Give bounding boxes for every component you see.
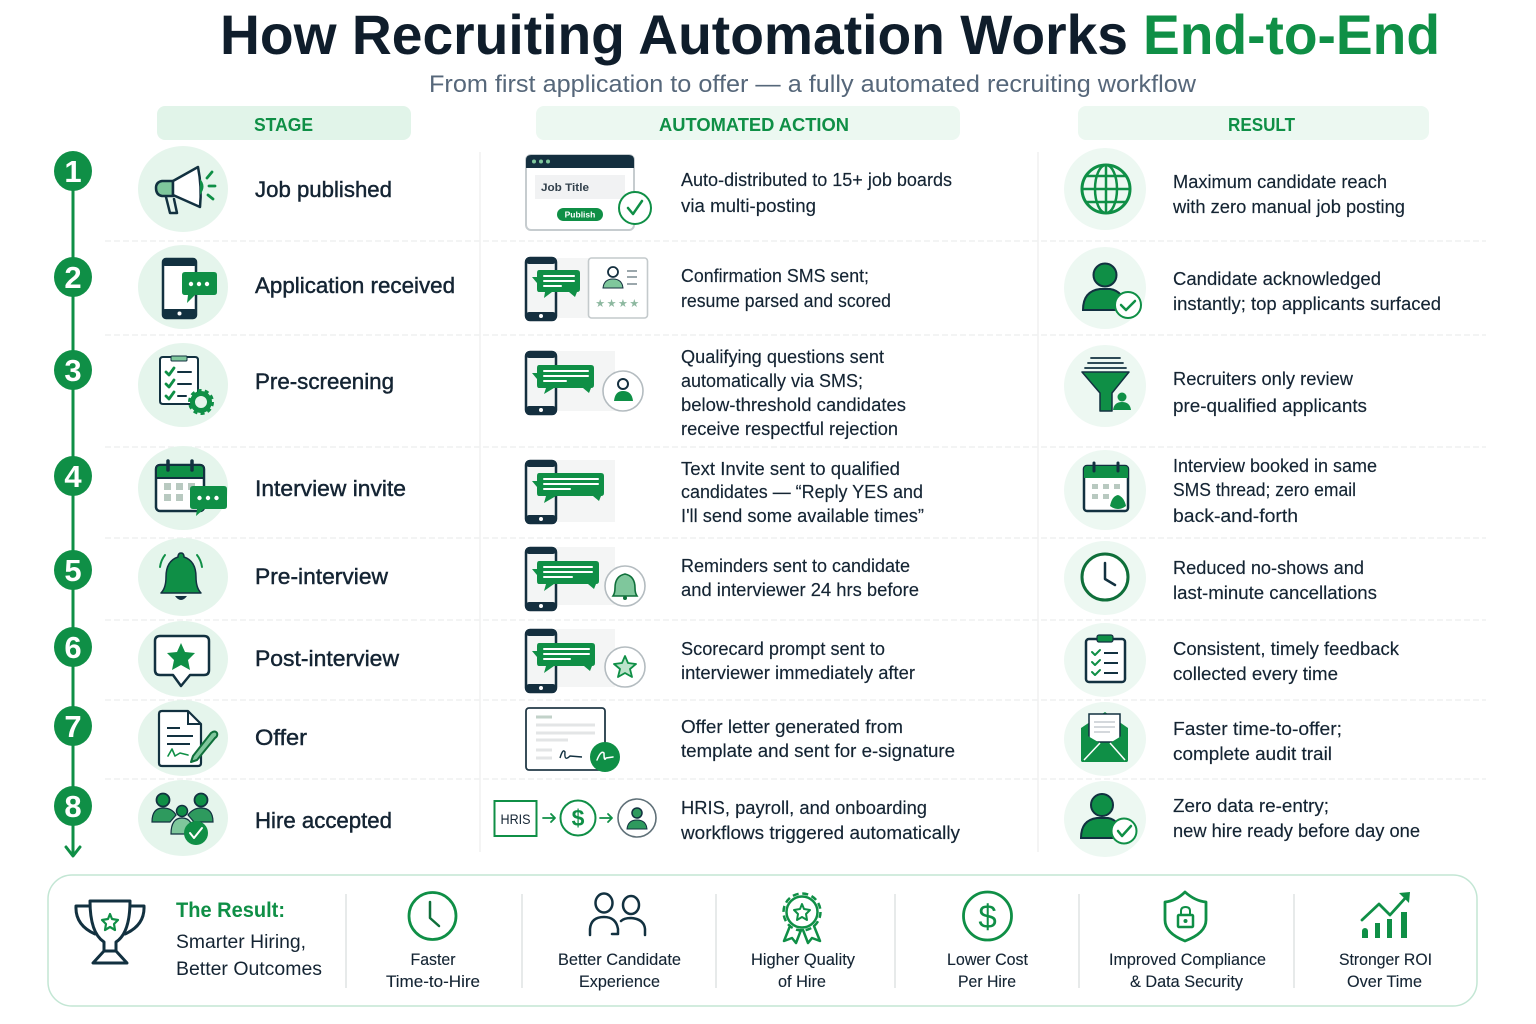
result text: Candidate acknowledged	[1173, 269, 1381, 289]
benefit: improved compliance and data security: & Data Security	[1130, 973, 1244, 991]
benefit: better candidate experience	[558, 894, 681, 991]
action icon: SMS and resume card	[526, 258, 648, 321]
result text: instantly; top applicants surfaced	[1173, 294, 1441, 314]
result text: Reduced no-shows and	[1173, 558, 1364, 578]
benefit: better candidate experience: Experience	[579, 973, 660, 991]
action text: automatically via SMS;	[681, 371, 863, 391]
result icon: new hire ready	[1064, 781, 1146, 857]
action icon: publish window: Job Title	[541, 182, 589, 194]
result icon: envelope	[1064, 702, 1146, 776]
step badge 3	[54, 350, 92, 390]
action text: candidates — “Reply YES and	[681, 482, 923, 502]
action icon: offer letter	[526, 708, 620, 772]
result text: Recruiters only review	[1173, 369, 1354, 389]
row 2: Application received	[54, 245, 1441, 329]
benefit: faster time-to-hire	[386, 892, 480, 991]
result text: back-and-forth	[1173, 506, 1298, 526]
result icon: clock	[1064, 541, 1146, 615]
action text: Text Invite sent to qualified	[681, 459, 900, 479]
benefit: improved compliance and data security	[1109, 892, 1266, 991]
stage label: Job published	[255, 177, 392, 202]
action icon: SMS invite	[526, 460, 615, 524]
icon: phone with chat bubble	[138, 245, 228, 329]
row 4: Interview invite	[54, 446, 1377, 530]
result text: SMS thread; zero email	[1173, 480, 1356, 500]
benefit: lower cost per hire: Lower Cost	[947, 951, 1028, 969]
benefit: improved compliance and data security: Improved Compliance	[1109, 951, 1266, 969]
action text	[681, 556, 919, 600]
action text: and interviewer 24 hrs before	[681, 580, 919, 600]
icon: calendar with chat	[138, 446, 228, 530]
step badge 5: 5	[64, 553, 82, 588]
stage label: Pre-screening	[255, 369, 394, 394]
row 8: Hire accepted	[54, 780, 1420, 857]
action text: receive respectful rejection	[681, 419, 898, 439]
icon: star speech bubble	[138, 621, 228, 697]
result text	[1173, 639, 1400, 684]
action icon: SMS to candidate	[526, 351, 643, 415]
icon: megaphone	[138, 146, 228, 232]
action text: I'll send some available times”	[681, 506, 924, 526]
benefit: higher quality of hire: of Hire	[778, 973, 826, 991]
result text: Zero data re-entry;	[1173, 796, 1329, 816]
benefit: stronger ROI over time: Over Time	[1347, 973, 1422, 991]
step badge 8: 8	[64, 789, 82, 824]
step badge 6	[54, 627, 92, 667]
result icon: acknowledged person	[1064, 247, 1146, 329]
result text	[1172, 172, 1405, 217]
step badge 7	[54, 706, 92, 746]
result text: complete audit trail	[1173, 744, 1332, 764]
action icon: HRIS, payroll, profile flow: HRIS	[500, 811, 530, 827]
benefit: higher quality of hire: Higher Quality	[751, 951, 856, 969]
benefit: lower cost per hire	[947, 892, 1028, 991]
result text	[1173, 719, 1342, 764]
column headers	[157, 106, 1429, 140]
stage label: Offer	[255, 725, 308, 750]
action text	[680, 798, 960, 843]
stage label: Pre-interview	[255, 564, 389, 589]
action icon: SMS reminder	[526, 547, 645, 611]
step badge 6: 6	[64, 630, 82, 665]
benefit: stronger ROI over time: Stronger ROI	[1339, 951, 1432, 969]
result text: collected every time	[1173, 664, 1338, 684]
result icon: globe	[1064, 148, 1146, 230]
action icon: SMS and resume card: ★★★★	[595, 298, 641, 310]
result heading: The Result:	[176, 899, 285, 922]
step badge 1	[54, 151, 92, 191]
result text	[1173, 269, 1441, 314]
step badge 7: 7	[64, 709, 82, 744]
result icon: clipboard	[1064, 623, 1146, 697]
icon: document and pen	[138, 700, 228, 776]
icon: checklist and gear	[138, 343, 228, 427]
benefit: better candidate experience: Better Candidate	[558, 951, 681, 969]
action text: HRIS, payroll, and onboarding	[681, 798, 927, 818]
result text	[1173, 796, 1420, 841]
step badge 4: 4	[64, 459, 82, 494]
result icon: booked calendar	[1064, 450, 1146, 530]
result text: pre-qualified applicants	[1173, 396, 1367, 416]
result text	[1173, 369, 1367, 416]
icon: team with check	[138, 780, 228, 856]
action text: Auto-distributed to 15+ job boards	[681, 170, 952, 190]
action icon: HRIS, payroll, profile flow: $	[572, 805, 585, 831]
timeline spine with arrow	[66, 171, 80, 856]
action text	[681, 170, 952, 216]
action text: Confirmation SMS sent;	[681, 266, 869, 286]
result heading: Smarter Hiring,	[176, 931, 306, 953]
stage label: Hire accepted	[255, 808, 392, 833]
action icon: publish window	[526, 155, 651, 230]
icon: trophy	[76, 901, 144, 963]
action icon: SMS scorecard	[526, 629, 645, 693]
result text: with zero manual job posting	[1172, 197, 1405, 217]
action text: workflows triggered automatically	[680, 823, 960, 843]
action text	[681, 717, 955, 761]
action text: Qualifying questions sent	[681, 347, 884, 367]
benefit: faster time-to-hire: Time-to-Hire	[386, 973, 480, 991]
benefit: higher quality of hire	[751, 894, 856, 991]
stage label: Post-interview	[255, 646, 400, 671]
step badge 2	[54, 257, 92, 297]
result icon: funnel	[1064, 345, 1146, 427]
row 1: Job published	[54, 146, 1405, 232]
column headers: AUTOMATED ACTION	[659, 115, 849, 135]
stage label: Application received	[255, 273, 455, 298]
result heading	[176, 899, 322, 980]
step badge 3: 3	[64, 353, 82, 388]
row 7: Offer	[54, 700, 1342, 776]
action text: below-threshold candidates	[681, 395, 906, 415]
step badge 4	[54, 456, 92, 496]
benefit: lower cost per hire: Per Hire	[958, 973, 1016, 991]
benefit: lower cost per hire: $	[978, 898, 997, 935]
action text	[681, 347, 906, 439]
action icon: HRIS, payroll, profile flow	[494, 799, 656, 837]
step badge 8	[54, 786, 92, 826]
column headers: RESULT	[1228, 115, 1295, 135]
icon: bell	[138, 538, 228, 616]
title highlight: End-to-End	[1143, 3, 1440, 66]
result text: Maximum candidate reach	[1173, 172, 1387, 192]
stage label: Interview invite	[255, 476, 406, 501]
row 6: Post-interview	[54, 621, 1400, 697]
result text: new hire ready before day one	[1173, 821, 1420, 841]
result text	[1173, 456, 1377, 526]
action text: interviewer immediately after	[681, 663, 915, 683]
action text	[681, 459, 924, 526]
action text	[681, 639, 915, 683]
action text: Reminders sent to candidate	[681, 556, 910, 576]
result heading: Better Outcomes	[176, 958, 322, 980]
subtitle: From first application to offer — a fully automated recruiting workflow	[429, 71, 1196, 98]
title: How Recruiting Automation Works	[220, 3, 1128, 66]
step badge 2: 2	[64, 260, 82, 295]
action text: via multi-posting	[681, 196, 816, 216]
step badge 5	[54, 550, 92, 590]
action text	[681, 266, 891, 311]
result text: Faster time-to-offer;	[1173, 719, 1342, 739]
result text: Interview booked in same	[1173, 456, 1377, 476]
action icon: publish window: Publish	[565, 210, 595, 220]
result text: last-minute cancellations	[1173, 583, 1377, 603]
benefit: stronger ROI over time	[1339, 892, 1432, 991]
row 3: Pre-screening	[54, 343, 1367, 439]
action text: Offer letter generated from	[681, 717, 903, 737]
action text: resume parsed and scored	[681, 291, 891, 311]
benefit: faster time-to-hire: Faster	[410, 951, 456, 969]
action text: template and sent for e-signature	[681, 741, 955, 761]
row 5: Pre-interview	[54, 538, 1377, 616]
action text: Scorecard prompt sent to	[681, 639, 885, 659]
column headers: STAGE	[254, 115, 313, 135]
result text	[1173, 558, 1377, 603]
step badge 1: 1	[64, 154, 82, 189]
result text: Consistent, timely feedback	[1173, 639, 1400, 659]
panel: the result summary	[48, 875, 1477, 1006]
